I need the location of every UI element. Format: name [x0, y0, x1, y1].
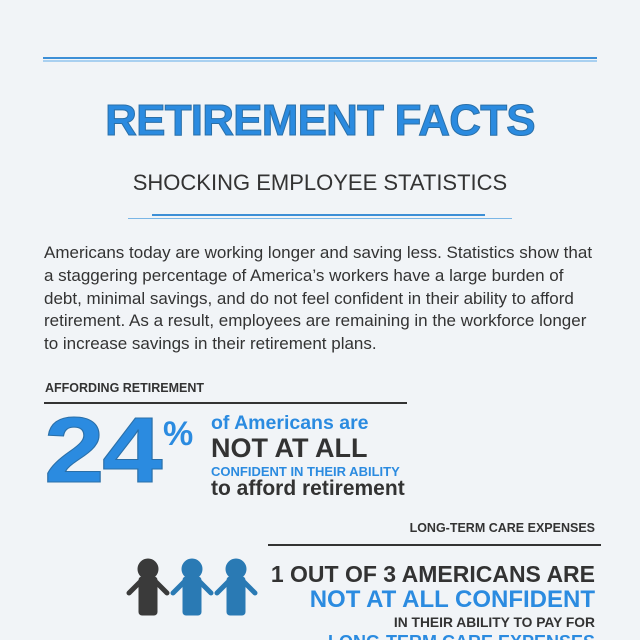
big stat 24%: %	[163, 415, 193, 453]
stat text	[211, 412, 405, 500]
stat text: long-term care: 1 OUT OF 3 AMERICANS ARE	[271, 561, 595, 587]
intro paragraph: retirement. As a result, employees are remaining in the workforce longer	[44, 311, 586, 330]
top rule	[43, 57, 597, 62]
big stat 24%: 24	[44, 398, 160, 502]
stat text: long-term care: NOT AT ALL CONFIDENT	[310, 586, 595, 613]
section heading: affording retirement: AFFORDING RETIREMENT	[45, 381, 204, 395]
intro paragraph: a staggering percentage of America’s workers have a large burden of	[44, 266, 563, 285]
stat text: NOT AT ALL	[211, 432, 367, 462]
subtitle: SHOCKING EMPLOYEE STATISTICS	[133, 170, 507, 195]
stat text: long-term care	[271, 561, 595, 640]
intro paragraph: debt, minimal savings, and do not feel confident in their ability to afford	[44, 289, 574, 308]
subtitle rule	[128, 214, 512, 219]
stat text: of Americans are	[211, 412, 369, 434]
stat text: long-term care: IN THEIR ABILITY TO PAY FOR	[394, 615, 595, 630]
intro paragraph: Americans today are working longer and saving less. Statistics show that	[44, 243, 592, 262]
title: RETIREMENT FACTS	[105, 96, 535, 145]
section heading: long-term care: LONG-TERM CARE EXPENSES	[410, 521, 595, 535]
intro paragraph: to increase savings in their retirement plans.	[44, 334, 377, 353]
stat text: CONFIDENT IN THEIR ABILITY	[211, 464, 400, 478]
intro paragraph	[44, 243, 592, 353]
icon: people	[126, 558, 258, 616]
stat text: to afford retirement	[211, 476, 405, 500]
